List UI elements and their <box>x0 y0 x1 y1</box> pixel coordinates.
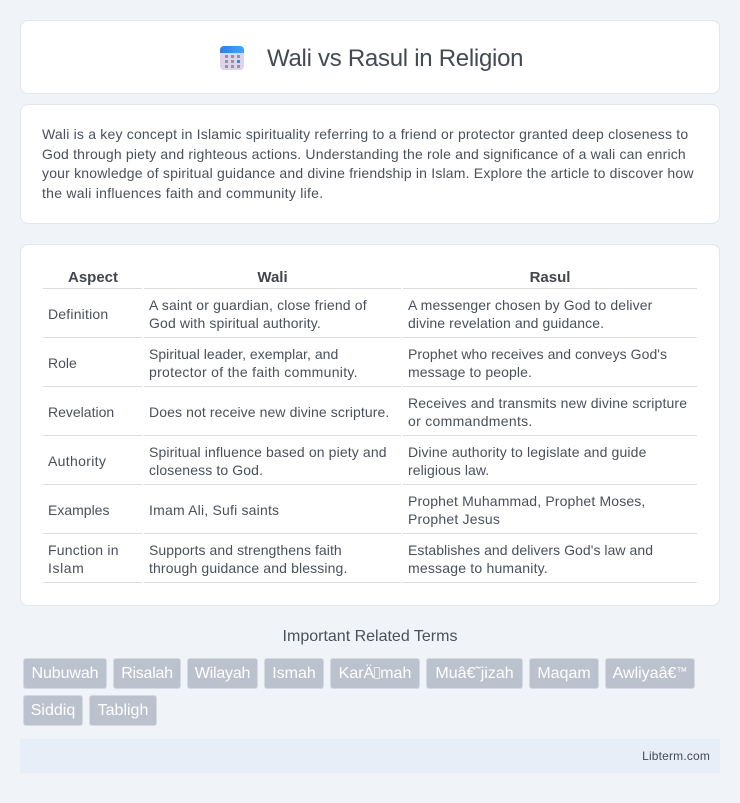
row: authority: religious law. <box>408 462 489 478</box>
tag <box>113 658 181 689</box>
tag: Nubuwah <box>32 665 98 682</box>
title: Wali vs Rasul in Religion <box>267 45 523 72</box>
row: function in Islam: through guidance and blessing. <box>149 560 348 576</box>
tag: Muâ€˜jizah <box>435 665 514 682</box>
row: authority: Spiritual influence based on piety and <box>149 444 387 460</box>
row: definition: divine revelation and guidance. <box>408 315 604 331</box>
tag: Ismah <box>272 665 316 682</box>
row: revelation: or commandments. <box>408 413 533 429</box>
table header: Rasul <box>530 269 570 286</box>
tag <box>187 658 258 689</box>
row: definition: Definition <box>48 306 108 322</box>
tag: KarÄ mah <box>339 665 411 682</box>
row: authority: Divine authority to legislate and guide <box>408 444 647 460</box>
tag <box>23 658 107 689</box>
panel: intro text: the wali influences faith and community life. <box>42 184 323 200</box>
row: function in Islam: Supports and strengthens faith <box>149 542 342 558</box>
row: examples: Prophet Muhammad, Prophet Moses, <box>408 493 645 509</box>
row: authority: Authority <box>48 453 106 469</box>
panel: intro text <box>20 104 720 224</box>
table header: Wali <box>257 269 288 286</box>
row: role <box>43 346 697 387</box>
footer credit: Libterm.com <box>642 749 710 763</box>
row: revelation: Receives and transmits new divine scripture <box>408 395 687 411</box>
row: examples: Imam Ali, Sufi saints <box>149 502 279 518</box>
row: examples <box>43 493 697 534</box>
row: role: Role <box>48 355 77 371</box>
panel: comparison table <box>20 244 720 606</box>
row: function in Islam: Function in <box>48 542 119 558</box>
row: role: Prophet who receives and conveys God's <box>408 346 667 362</box>
row: authority: closeness to God. <box>149 462 263 478</box>
row: examples: Prophet Jesus <box>408 511 500 527</box>
row: role: protector of the faith community. <box>149 364 358 380</box>
heading: related terms: Important Related Terms <box>283 628 457 645</box>
footer <box>20 739 720 773</box>
row: revelation: Revelation <box>48 404 114 420</box>
row: revelation: Does not receive new divine scripture. <box>149 404 389 420</box>
tag <box>605 658 695 689</box>
row: function in Islam: message to humanity. <box>408 560 548 576</box>
related term tags <box>23 658 695 726</box>
panel: intro text: God through piety and righteous actions. Understanding the role and significance of a wali can enrich <box>42 146 686 162</box>
tag: Siddiq <box>31 702 75 719</box>
tag: Risalah <box>121 665 173 682</box>
tag <box>23 695 83 726</box>
row: definition <box>43 297 697 338</box>
tag: Maqam <box>537 665 591 682</box>
row: definition: A saint or guardian, close friend of <box>149 297 367 313</box>
table header <box>43 269 697 289</box>
icon: calendar grid <box>220 46 244 70</box>
header card <box>20 20 720 94</box>
tag: Awliyaâ€™ <box>613 665 687 682</box>
tag: Tabligh <box>98 702 148 719</box>
row: authority <box>43 444 697 485</box>
panel: intro text: Wali is a key concept in Islamic spirituality referring to a friend or protector granted deep closeness to <box>42 126 688 142</box>
row: definition: God with spiritual authority. <box>149 315 321 331</box>
tag <box>529 658 599 689</box>
tag <box>264 658 324 689</box>
row: examples: Examples <box>48 502 109 518</box>
row: revelation <box>43 395 697 436</box>
row: function in Islam: Establishes and delivers God's law and <box>408 542 653 558</box>
row: role: message to people. <box>408 364 532 380</box>
tag <box>426 658 523 689</box>
row: role: Spiritual leader, exemplar, and <box>149 346 338 362</box>
table header: Aspect <box>68 269 118 286</box>
row: definition: A messenger chosen by God to deliver <box>408 297 652 313</box>
row: function in Islam <box>43 542 697 583</box>
panel: intro text: your knowledge of spiritual guidance and divine friendship in Islam. Explore the article to discover how <box>42 165 694 181</box>
tag <box>330 658 420 689</box>
tag <box>89 695 157 726</box>
row: function in Islam: Islam <box>48 560 84 576</box>
tag: Wilayah <box>195 665 250 682</box>
